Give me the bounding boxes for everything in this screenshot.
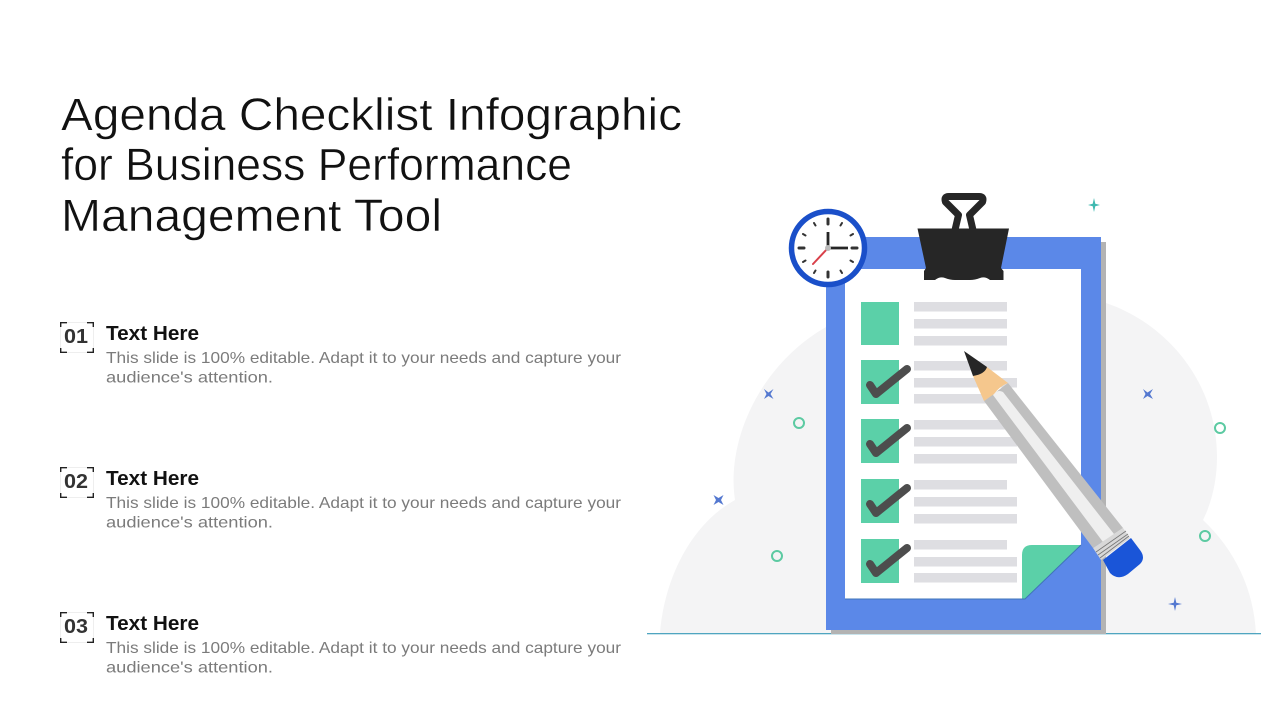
icon: clock [792, 212, 864, 284]
checklist row 3 [861, 419, 1017, 464]
heading 03: Text Here [106, 613, 199, 635]
description 02: audience's attention. [106, 514, 273, 532]
checklist row 2 [861, 360, 1017, 404]
description 01: This slide is 100% editable. Adapt it to your needs and capture your [106, 350, 622, 367]
ring decorations [772, 418, 1225, 561]
background cloud [660, 303, 1256, 634]
title: Agenda Checklist Infographic [61, 89, 682, 140]
sparkle decorations [714, 198, 1182, 611]
number badge 02 [61, 468, 93, 497]
icon: binder clip [918, 196, 1009, 280]
heading 02: Text Here [106, 468, 199, 490]
paper sheet [845, 269, 1081, 599]
description 03 [106, 640, 622, 676]
agenda item 01 [61, 323, 622, 386]
number badge 02: 02 [64, 471, 88, 493]
title [61, 89, 682, 241]
checklist row 5 [861, 539, 1017, 583]
description 02 [106, 495, 622, 532]
description 01: audience's attention. [106, 370, 273, 386]
description 03: This slide is 100% editable. Adapt it to your needs and capture your [106, 640, 622, 657]
number badge 03: 03 [64, 616, 88, 638]
checklist row 4 [861, 479, 1017, 524]
icon: pencil [964, 351, 1143, 577]
agenda item 03 [61, 613, 622, 676]
ground line [647, 633, 1261, 634]
checklist row 1 [861, 302, 1007, 346]
description 01 [106, 350, 622, 386]
heading 01: Text Here [106, 323, 199, 345]
title: for Business Performance [61, 139, 572, 190]
title: Management Tool [61, 190, 442, 241]
number badge 03 [61, 613, 93, 642]
number badge 01 [61, 323, 93, 352]
agenda item 02 [61, 468, 622, 532]
clipboard board [826, 237, 1106, 634]
illustration: clipboard checklist [647, 196, 1261, 634]
description 02: This slide is 100% editable. Adapt it to your needs and capture your [106, 495, 622, 512]
number badge 01: 01 [64, 326, 88, 348]
description 03: audience's attention. [106, 660, 273, 676]
